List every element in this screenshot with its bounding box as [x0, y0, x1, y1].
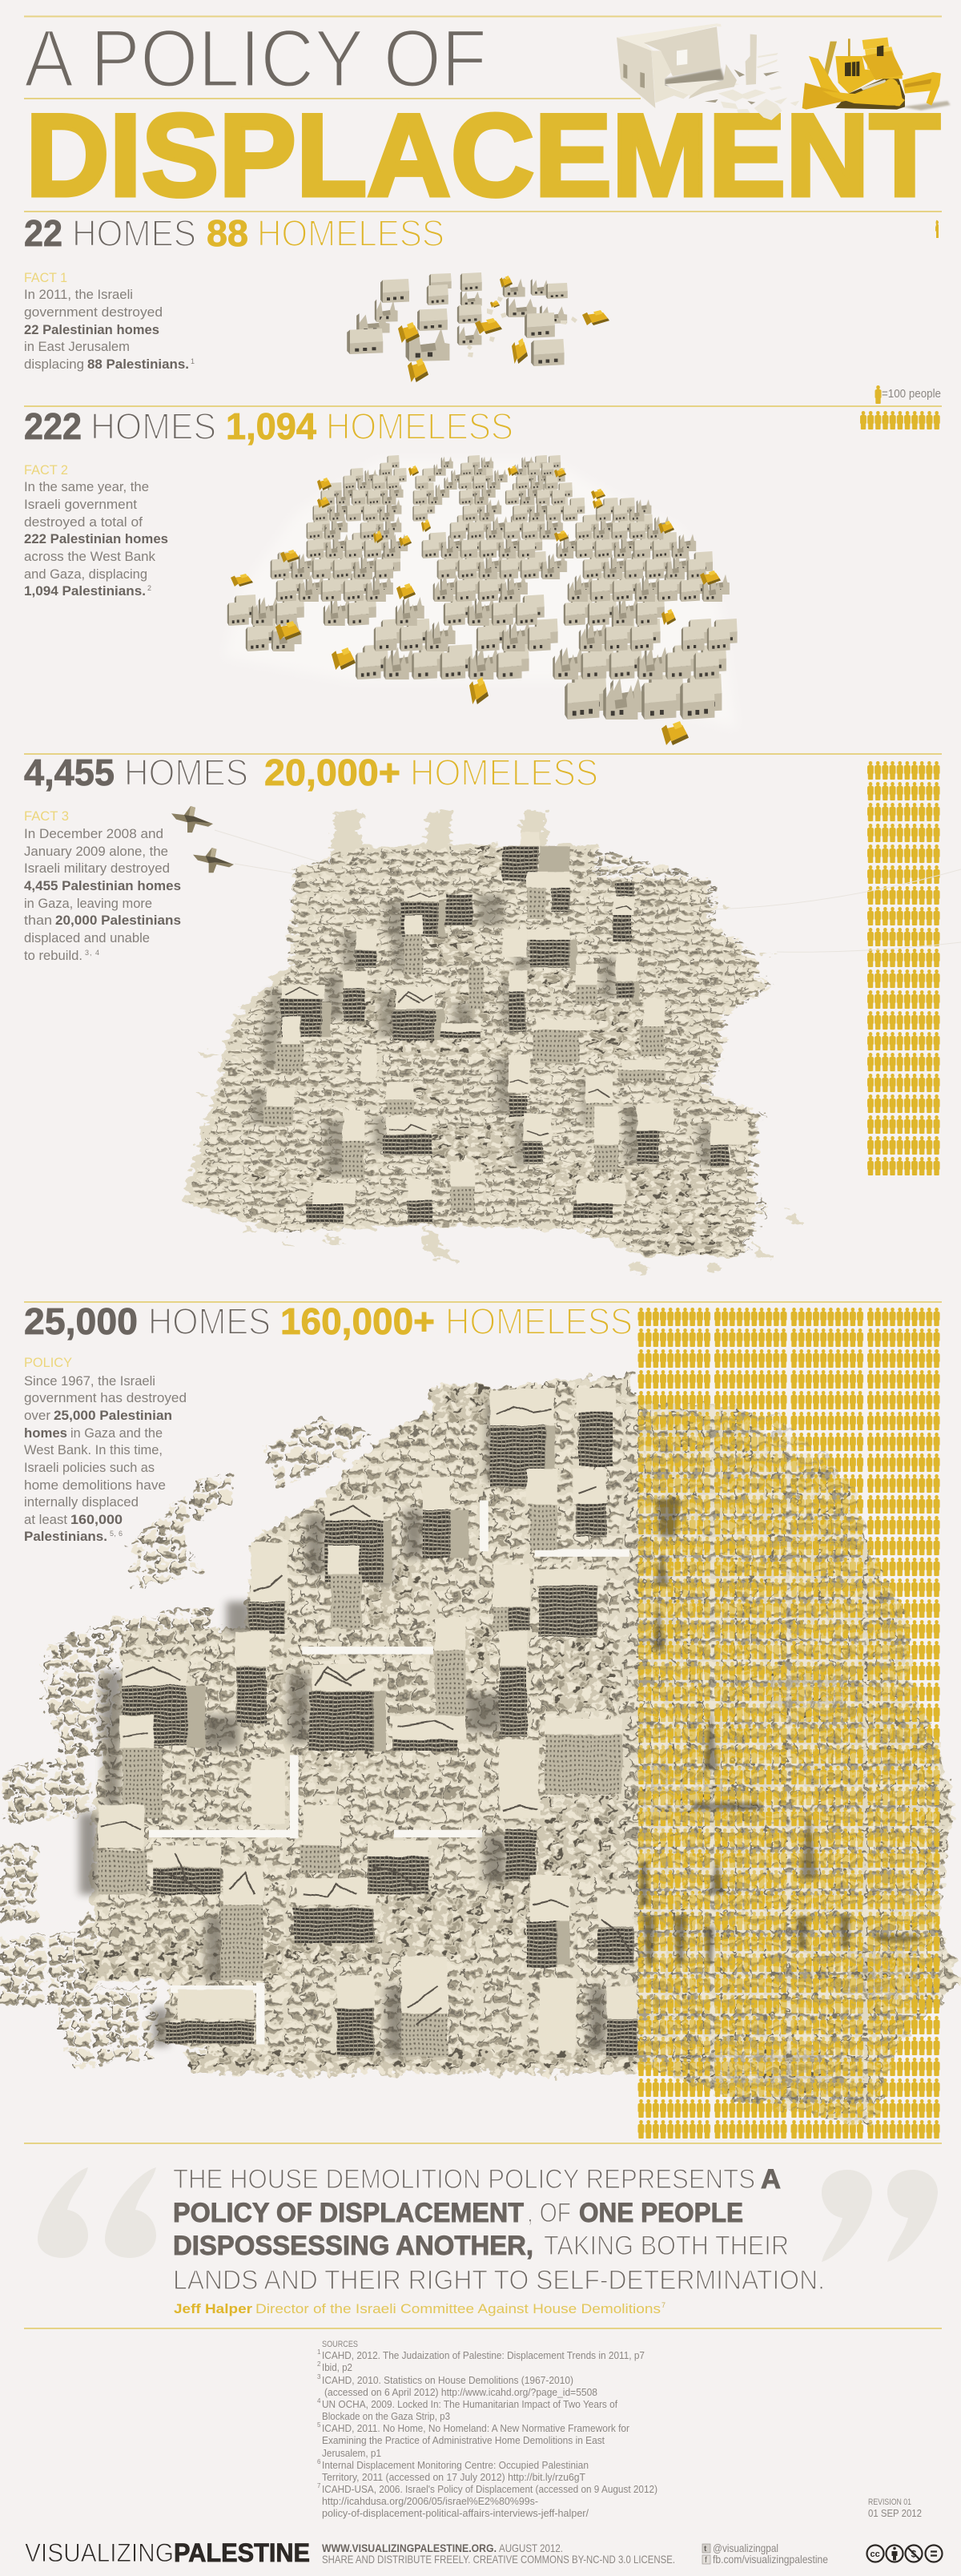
legend: one figure equals 100 people: =100 people	[882, 387, 941, 401]
text: license: AUGUST 2012.	[499, 2542, 563, 2554]
icon: fighter jets and trails	[171, 806, 961, 952]
text: social links: fb.com/visualizingpalestine	[713, 2553, 828, 2566]
text: policy: homes	[24, 1426, 67, 1441]
text: sources: Internal Displacement Monitoring Centre: Occupied Palestinian	[322, 2460, 589, 2471]
text: policy: Israeli policies such as	[24, 1461, 155, 1475]
text: quote	[173, 2164, 825, 2296]
text: fact 2: FACT 2	[24, 463, 68, 478]
people count: 88	[935, 220, 939, 238]
text: revision: 01 SEP 2012	[868, 2507, 922, 2519]
text: fact 3: 4,455 Palestinian homes	[24, 879, 181, 893]
text: policy: over	[24, 1409, 51, 1423]
text: policy: internally displaced	[24, 1495, 139, 1510]
heading: 25,000 homes 160,000+ homeless: HOMELESS	[445, 1300, 633, 1342]
illustration: ruined house	[617, 23, 951, 120]
section 4	[0, 1300, 959, 2141]
text: policy: West Bank. In this time,	[24, 1443, 163, 1457]
text: fact 3: in Gaza, leaving more	[24, 897, 152, 911]
text: sources: 4	[317, 2397, 321, 2405]
illustration: ruins showing through the figures	[637, 1407, 938, 2127]
text: social links	[702, 2542, 828, 2566]
text: fact 2: 1,094 Palestinians.	[24, 584, 146, 599]
text: quote: DISPOSSESSING ANOTHER,	[173, 2231, 533, 2261]
text: sources: UN OCHA, 2009. Locked In: The Humanitarian Impact of Two Years of	[322, 2399, 617, 2410]
text: sources: Jerusalem, p1	[322, 2448, 381, 2459]
text: fact 1: 1	[191, 357, 195, 365]
text: policy: 25,000 Palestinian	[54, 1409, 172, 1423]
people count: 160,000	[637, 1308, 940, 2141]
text: fact 3: 20,000 Palestinians	[55, 913, 181, 928]
heading: 22 homes 88 homeless: 22	[24, 212, 62, 254]
heading: 25,000 homes 160,000+ homeless	[24, 1300, 633, 1342]
text: sources: (accessed on 6 April 2012) http://www.icahd.org/?page_id=5508	[324, 2387, 597, 2398]
text: fact 3	[24, 809, 181, 963]
text: fact 1: 22 Palestinian homes	[24, 323, 159, 337]
text: quote: LANDS AND THEIR RIGHT TO SELF-DETERMINATION.	[173, 2265, 825, 2296]
text: sources: Territory, 2011 (accessed on 17 July 2012) http://bit.ly/rzu6gT	[322, 2472, 585, 2483]
text: fact 1: displacing	[24, 357, 84, 372]
heading: 22 homes 88 homeless	[24, 212, 444, 254]
text: fact 3: FACT 3	[24, 809, 69, 824]
text: policy: government has destroyed	[24, 1391, 187, 1405]
heading: 22 homes 88 homeless: HOMES	[72, 212, 196, 254]
text: attribution: 7	[661, 2301, 665, 2309]
text: fact 2: Israeli government	[24, 498, 137, 512]
text: license: SHARE AND DISTRIBUTE FREELY. CREATIVE COMMONS BY-NC-ND 3.0 LICENSE.	[322, 2553, 675, 2566]
heading: 22 homes 88 homeless: 88	[207, 212, 248, 254]
heading: 222 homes 1,094 homeless: 222	[24, 405, 82, 447]
text: fact 1: In 2011, the Israeli	[24, 288, 133, 302]
text: sources: ICAHD, 2011. No Home, No Homeland: A New Normative Framework for	[322, 2423, 629, 2434]
heading: 4,455 homes 20,000+ homeless: 20,000+	[264, 752, 400, 793]
icon: creative commons badges: cc	[870, 2550, 880, 2559]
text: fact 2: 222 Palestinian homes	[24, 532, 168, 546]
text: license	[322, 2542, 675, 2566]
text: revision	[868, 2497, 922, 2519]
icon: creative commons badges: $	[911, 2548, 916, 2559]
text: fact 1: government destroyed	[24, 305, 163, 320]
text: attribution: Jeff Halper	[174, 2301, 252, 2316]
text: sources: ICAHD, 2012. The Judaization of Palestine: Displacement Trends in 2011, p7	[322, 2350, 645, 2361]
text: fact 3: In December 2008 and	[24, 827, 163, 841]
text: attribution: Director of the Israeli Committee Against House Demolitions	[255, 2301, 661, 2316]
text: sources: Examining the Practice of Administrative Home Demolitions in East	[322, 2435, 605, 2446]
text: fact 3: 3, 4	[85, 949, 99, 957]
illustration: Gaza ruins	[184, 811, 802, 1273]
text: social links: f	[705, 2556, 707, 2565]
section 1	[24, 212, 942, 404]
text: fact 2	[24, 463, 168, 599]
icon: closing quote marks	[822, 2170, 938, 2262]
text: revision: REVISION 01	[868, 2497, 911, 2507]
text: fact 1: in East Jerusalem	[24, 340, 130, 354]
text: policy	[24, 1356, 187, 1544]
logo: Visualizing Palestine: PALESTINE	[174, 2538, 310, 2567]
panel: quote	[24, 2143, 942, 2328]
text: sources: 6	[317, 2458, 321, 2465]
text: fact 3: to rebuild.	[24, 949, 82, 963]
text: policy: 160,000	[70, 1513, 123, 1527]
section 3	[24, 752, 961, 1273]
heading: 222 homes 1,094 homeless: HOMES	[90, 405, 216, 447]
text: license: WWW.VISUALIZINGPALESTINE.ORG.	[322, 2542, 497, 2554]
heading: 4,455 homes 20,000+ homeless: HOMELESS	[410, 752, 598, 793]
title: A Policy Of: A POLICY OF	[24, 13, 487, 104]
text: fact 1: 88 Palestinians.	[87, 357, 189, 372]
legend: one figure equals 100 people	[875, 385, 941, 404]
text: quote: POLICY OF DISPLACEMENT	[173, 2198, 524, 2228]
text: fact 2: and Gaza, displacing	[24, 567, 147, 582]
people count: 1,094	[860, 411, 940, 430]
heading: 222 homes 1,094 homeless	[24, 405, 513, 447]
text: fact 1	[24, 271, 195, 372]
text: sources: 7	[317, 2482, 321, 2489]
text: sources: policy-of-displacement-political-affairs-interviews-jeff-halper/	[322, 2508, 589, 2519]
text: quote: THE HOUSE DEMOLITION POLICY REPRESENTS	[173, 2164, 755, 2195]
heading: 4,455 homes 20,000+ homeless: 4,455	[24, 752, 115, 793]
illustration: 222 demolished homes	[224, 455, 739, 745]
text: sources: ICAHD, 2010. Statistics on House Demolitions (1967-2010)	[322, 2375, 573, 2386]
logo: Visualizing Palestine: VISUALIZING	[25, 2538, 174, 2567]
heading: 222 homes 1,094 homeless: 1,094	[226, 405, 316, 447]
heading: 25,000 homes 160,000+ homeless: 25,000	[24, 1300, 138, 1342]
title: Displacement: DISPLACEMENT	[26, 90, 940, 220]
text: fact 1: FACT 1	[24, 271, 67, 285]
text: sources: SOURCES	[322, 2340, 358, 2349]
icon: opening quote marks	[38, 2167, 156, 2258]
icon: creative commons badges	[867, 2545, 942, 2562]
logo: Visualizing Palestine	[25, 2538, 310, 2567]
heading: 4,455 homes 20,000+ homeless: HOMES	[124, 752, 248, 793]
text: policy: home demolitions have	[24, 1478, 166, 1493]
text: policy: POLICY	[24, 1356, 72, 1370]
text: fact 3: Israeli military destroyed	[24, 861, 170, 876]
text: quote: , OF	[527, 2198, 571, 2228]
text: fact 3: January 2009 alone, the	[24, 845, 168, 859]
text: policy: at least	[24, 1513, 67, 1527]
heading: 222 homes 1,094 homeless: HOMELESS	[326, 405, 513, 447]
heading: 25,000 homes 160,000+ homeless: 160,000+	[280, 1300, 435, 1342]
title block	[24, 13, 942, 220]
footer	[25, 2538, 942, 2567]
text: fact 2: destroyed a total of	[24, 515, 143, 530]
text: sources: 3	[317, 2373, 321, 2380]
section 2	[24, 405, 942, 745]
text: sources: 2	[317, 2360, 321, 2368]
text: social links: t	[704, 2545, 707, 2554]
heading: 25,000 homes 160,000+ homeless: HOMES	[148, 1300, 271, 1342]
text: sources: Blockade on the Gaza Strip, p3	[322, 2411, 450, 2422]
text: sources: 5	[317, 2421, 321, 2429]
text: quote: ONE PEOPLE	[579, 2198, 743, 2228]
text: fact 2: In the same year, the	[24, 480, 149, 494]
people count: 20,000	[867, 761, 940, 1178]
illustration: 22 demolished homes	[347, 272, 609, 382]
heading: 4,455 homes 20,000+ homeless	[24, 752, 598, 793]
text: social links: @visualizingpal	[713, 2542, 778, 2554]
text: fact 2: across the West Bank	[24, 550, 156, 564]
text: sources	[317, 2340, 657, 2519]
text: sources: Ibid, p2	[322, 2362, 352, 2373]
text: sources: 1	[317, 2348, 321, 2356]
text: fact 3: displaced and unable	[24, 931, 150, 945]
text: policy: 5, 6	[110, 1530, 123, 1538]
text: sources: http://icahdusa.org/2006/05/israel%E2%80%99s-	[322, 2496, 538, 2507]
text: sources: ICAHD-USA, 2006. Israel's Policy of Displacement (accessed on 9 August 2012)	[322, 2484, 657, 2495]
text: policy: in Gaza and the	[70, 1426, 163, 1441]
illustration: city-wide ruins	[0, 1374, 959, 2127]
text: fact 3: than	[24, 913, 52, 928]
text: quote: A	[761, 2164, 781, 2195]
text: fact 2: 2	[147, 584, 151, 592]
text: policy: Palestinians.	[24, 1530, 107, 1544]
text: quote: TAKING BOTH THEIR	[544, 2231, 789, 2261]
text: policy: Since 1967, the Israeli	[24, 1374, 155, 1389]
heading: 22 homes 88 homeless: HOMELESS	[257, 212, 444, 254]
